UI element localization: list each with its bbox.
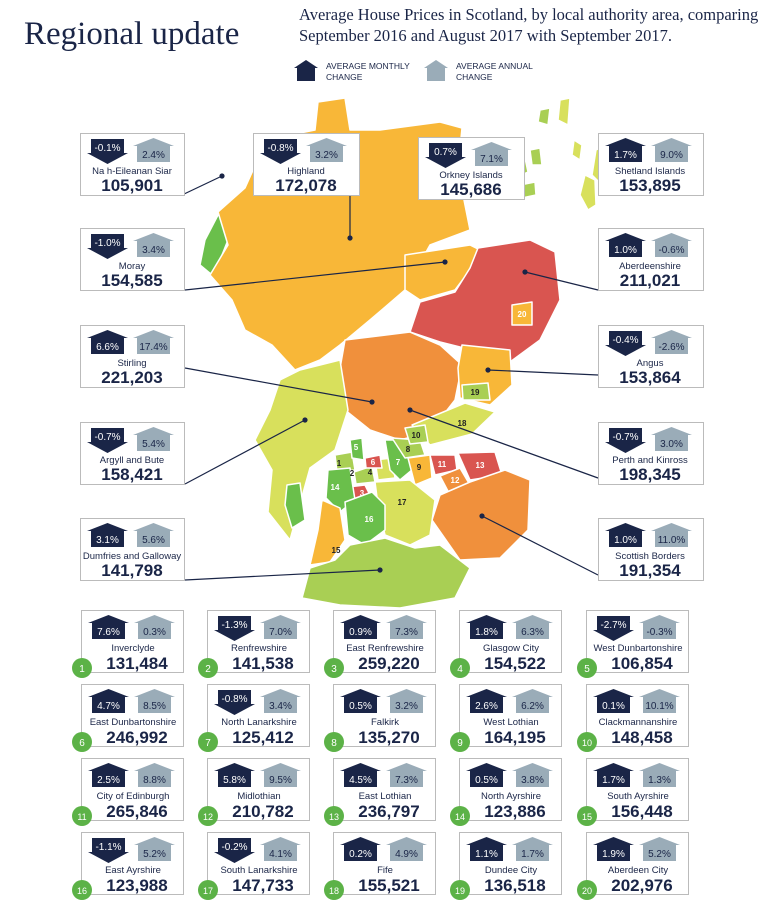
subtitle [299, 5, 758, 45]
grid card 17: South Lanarkshire: 4.1% [269, 849, 292, 860]
grid card 1: Inverclyde: 0.3% [143, 627, 166, 638]
grid card 1: Inverclyde: 1 [79, 664, 85, 675]
grid card 7: North Lanarkshire: 7 [205, 738, 211, 749]
region: Dundee [462, 383, 490, 400]
card: Moray: 3.4% [142, 245, 165, 256]
card: Stirling: Stirling [117, 358, 147, 369]
subtitle: Average House Prices in Scotland, by local authority area, comparing [299, 5, 758, 24]
grid card 16: East Ayrshire: -1.1% [95, 842, 122, 853]
card: Na h-Eileanan Siar: -0.1% [94, 143, 121, 154]
legend: AVERAGE MONTHLY [326, 61, 410, 71]
grid card 11: City of Edinburgh: 8.8% [143, 775, 166, 786]
grid card 10: Clackmannanshire: Clackmannanshire [599, 717, 677, 728]
grid card 10: Clackmannanshire: 0.1% [602, 701, 625, 712]
grid card 11: City of Edinburgh: 265,846 [106, 802, 168, 821]
grid card 8: Falkirk: 0.5% [349, 701, 372, 712]
card: Scottish Borders: Scottish Borders [615, 551, 685, 562]
map numbers: 14 [331, 483, 340, 492]
grid card 11: City of Edinburgh: 11 [77, 812, 87, 822]
card: Scottish Borders [598, 518, 704, 580]
map numbers: 8 [406, 445, 411, 454]
card: Shetland Islands: 1.7% [614, 150, 637, 161]
grid card 7: North Lanarkshire: 125,412 [232, 728, 294, 747]
grid card 11: City of Edinburgh: 2.5% [97, 775, 120, 786]
region: Fife [412, 403, 495, 445]
card: Shetland Islands: Shetland Islands [615, 166, 685, 177]
grid card 14: North Ayrshire: 123,886 [484, 802, 546, 821]
card: Scottish Borders: 1.0% [614, 535, 637, 546]
card: Shetland Islands: 9.0% [660, 150, 683, 161]
map numbers: 9 [417, 463, 422, 472]
grid card 1: Inverclyde [72, 610, 184, 678]
card: Perth and Kinross: 3.0% [660, 439, 683, 450]
legend: CHANGE [456, 72, 493, 82]
grid card 16: East Ayrshire: East Ayrshire [105, 865, 161, 876]
grid card 20: Aberdeen City [577, 832, 688, 900]
grid card 8: Falkirk [324, 684, 436, 752]
legend: CHANGE [326, 72, 363, 82]
grid card 4: Glasgow City: 6.3% [521, 627, 544, 638]
card: Orkney Islands: 0.7% [434, 147, 457, 158]
card: Argyll and Bute: Argyll and Bute [100, 455, 164, 466]
grid card 4: Glasgow City: Glasgow City [483, 643, 539, 654]
region: Argyll and Bute [255, 360, 348, 540]
grid card 2: Renfrewshire: 141,538 [232, 654, 294, 673]
grid card 18: Fife [324, 832, 436, 900]
card: Dumfries and Galloway: Dumfries and Galloway [83, 551, 181, 562]
grid card 8: Falkirk: 135,270 [358, 728, 420, 747]
card: Argyll and Bute: 5.4% [142, 439, 165, 450]
grid card 19: Dundee City: 1.1% [475, 849, 498, 860]
grid card 15: South Ayrshire: South Ayrshire [607, 791, 669, 802]
grid card 7: North Lanarkshire: 3.4% [269, 701, 292, 712]
grid card 6: East Dunbartonshire: 8.5% [143, 701, 166, 712]
card: Na h-Eileanan Siar: Na h-Eileanan Siar [92, 166, 172, 177]
grid card 10: Clackmannanshire: 10.1% [645, 701, 674, 712]
card: Highland: 3.2% [315, 150, 338, 161]
grid card 20: Aberdeen City: 202,976 [611, 876, 673, 895]
grid card 2: Renfrewshire [198, 610, 310, 678]
grid card 7: North Lanarkshire [198, 684, 310, 752]
region: Scottish Borders [432, 470, 530, 560]
grid card 18: Fife: 0.2% [349, 849, 372, 860]
grid card 17: South Lanarkshire: 17 [203, 886, 213, 896]
grid card 18: Fife: Fife [377, 865, 393, 876]
grid card 13: East Lothian: 236,797 [358, 802, 420, 821]
grid card 3: East Renfrewshire: East Renfrewshire [346, 643, 424, 654]
card: Orkney Islands: 145,686 [440, 180, 502, 199]
region: East Ayrshire [345, 492, 385, 545]
grid card 12: Midlothian: 9.5% [269, 775, 292, 786]
grid card 9: West Lothian: 2.6% [475, 701, 498, 712]
map numbers: 16 [365, 515, 374, 524]
grid card 2: Renfrewshire: 2 [205, 664, 211, 675]
grid card 19: Dundee City: 1.7% [521, 849, 544, 860]
card: Shetland Islands [598, 134, 704, 196]
card: Perth and Kinross [598, 422, 704, 484]
card: Angus: -0.4% [612, 335, 639, 346]
map numbers: 10 [412, 431, 421, 440]
grid card 16: East Ayrshire: 123,988 [106, 876, 168, 895]
grid card 7: North Lanarkshire: North Lanarkshire [221, 717, 297, 728]
grid card 15: South Ayrshire [577, 758, 688, 826]
title: Regional update [24, 16, 239, 52]
grid card 18: Fife: 18 [329, 886, 339, 896]
grid card 5: West Dunbartonshire: -0.3% [646, 627, 673, 638]
grid card 20: Aberdeen City: Aberdeen City [608, 865, 668, 876]
grid card 12: Midlothian: 5.8% [223, 775, 246, 786]
grid card 9: West Lothian: 164,195 [484, 728, 546, 747]
card: Stirling: 17.4% [139, 342, 168, 353]
grid card 14: North Ayrshire: North Ayrshire [481, 791, 541, 802]
map numbers: 18 [458, 419, 467, 428]
map numbers: 20 [518, 310, 527, 319]
map numbers: 12 [451, 476, 460, 485]
grid card 9: West Lothian: 9 [457, 738, 463, 749]
grid card 11: City of Edinburgh: City of Edinburgh [97, 791, 169, 802]
card: Highland: 172,078 [275, 176, 337, 195]
grid card 3: East Renfrewshire [324, 610, 436, 678]
grid card 5: West Dunbartonshire: 5 [584, 664, 590, 675]
map numbers: 11 [438, 460, 447, 469]
card: Highland [254, 134, 360, 196]
card: Na h-Eileanan Siar [80, 134, 184, 196]
card: Dumfries and Galloway: 3.1% [96, 535, 119, 546]
grid card 2: Renfrewshire: 7.0% [269, 627, 292, 638]
grid card 10: Clackmannanshire: 10 [582, 738, 592, 748]
region: Dumfries and Galloway [302, 538, 470, 608]
card: Moray: 154,585 [101, 271, 163, 290]
card: Highland: -0.8% [267, 143, 294, 154]
card: Perth and Kinross: -0.7% [612, 432, 639, 443]
card: Argyll and Bute: -0.7% [94, 432, 121, 443]
map numbers [331, 310, 527, 555]
grid card 17: South Lanarkshire: -0.2% [221, 842, 248, 853]
region: Highland [210, 98, 470, 370]
grid card 4: Glasgow City: 154,522 [484, 654, 546, 673]
map numbers: 15 [332, 546, 341, 555]
grid card 20: Aberdeen City: 20 [582, 886, 592, 896]
region: Shetland [558, 98, 610, 210]
grid card 14: North Ayrshire: 0.5% [475, 775, 498, 786]
grid card 17: South Lanarkshire: South Lanarkshire [220, 865, 298, 876]
grid card 6: East Dunbartonshire: 246,992 [106, 728, 168, 747]
grid card 6: East Dunbartonshire: 4.7% [97, 701, 120, 712]
grid card 20: Aberdeen City: 1.9% [602, 849, 625, 860]
grid card 19: Dundee City [450, 832, 562, 900]
grid card 15: South Ayrshire: 15 [582, 812, 592, 822]
card: Na h-Eileanan Siar: 105,901 [101, 176, 163, 195]
map numbers: 6 [371, 458, 376, 467]
grid card 16: East Ayrshire: 5.2% [143, 849, 166, 860]
map of Scotland [200, 98, 610, 608]
grid card 14: North Ayrshire [450, 758, 562, 826]
grid card 5: West Dunbartonshire: 106,854 [611, 654, 673, 673]
card: Scottish Borders: 11.0% [658, 535, 685, 546]
grid card 20: Aberdeen City: 5.2% [648, 849, 671, 860]
card: Moray [80, 228, 184, 290]
card: Aberdeenshire: -0.6% [658, 245, 685, 256]
legend [294, 60, 533, 82]
legend: AVERAGE ANNUAL [456, 61, 533, 71]
grid card 16: East Ayrshire: 16 [77, 886, 87, 896]
grid card 13: East Lothian: 4.5% [349, 775, 372, 786]
grid card 15: South Ayrshire: 1.3% [648, 775, 671, 786]
grid card 2: Renfrewshire: -1.3% [221, 620, 248, 631]
region: Orkney [512, 108, 550, 198]
map numbers: 7 [396, 458, 401, 467]
grid card 6: East Dunbartonshire: East Dunbartonshire [90, 717, 176, 728]
grid card 14: North Ayrshire: 14 [455, 812, 465, 822]
grid card 8: Falkirk: Falkirk [371, 717, 399, 728]
grid card 17: South Lanarkshire [198, 832, 310, 900]
grid card 4: Glasgow City [450, 610, 562, 678]
card: Orkney Islands [418, 138, 524, 200]
grid card 12: Midlothian: 12 [203, 812, 213, 822]
subtitle: September 2016 and August 2017 with September 2017. [299, 26, 672, 45]
card: Orkney Islands: Orkney Islands [439, 170, 503, 181]
map numbers: 1 [337, 459, 342, 468]
grid card 17: South Lanarkshire: 147,733 [232, 876, 294, 895]
region: South Lanarkshire [375, 480, 435, 545]
region: South Ayrshire [310, 500, 345, 565]
grid card 15: South Ayrshire: 156,448 [611, 802, 673, 821]
card: Dumfries and Galloway: 5.6% [142, 535, 165, 546]
card: Aberdeenshire: 211,021 [620, 271, 680, 290]
region: Arran [285, 483, 305, 528]
map numbers: 17 [398, 498, 407, 507]
card: Highland: Highland [287, 166, 325, 177]
map numbers: 5 [354, 443, 359, 452]
card: Angus: -2.6% [658, 342, 685, 353]
grid card 13: East Lothian: 7.3% [395, 775, 418, 786]
map numbers: 13 [476, 461, 485, 470]
region: Moray [405, 245, 480, 300]
card: Moray: -1.0% [94, 238, 121, 249]
grid card 14: North Ayrshire: 3.8% [521, 775, 544, 786]
central belt [335, 452, 355, 472]
map numbers: 19 [471, 388, 480, 397]
grid card 1: Inverclyde: Inverclyde [111, 643, 155, 654]
grid card 1: Inverclyde: 131,484 [106, 654, 168, 673]
grid card 2: Renfrewshire: Renfrewshire [231, 643, 287, 654]
region: Aberdeen City [512, 302, 532, 325]
grid card 7: North Lanarkshire: -0.8% [221, 694, 248, 705]
grid card 19: Dundee City: 19 [455, 886, 465, 896]
card: Perth and Kinross: Perth and Kinross [612, 455, 688, 466]
card: Stirling: 221,203 [101, 368, 163, 387]
map numbers: 4 [368, 468, 373, 477]
grid card 10: Clackmannanshire: 148,458 [611, 728, 673, 747]
card: Scottish Borders: 191,354 [619, 561, 681, 580]
card: Moray: Moray [119, 261, 145, 272]
region: Perth and Kinross [338, 332, 462, 440]
grid card 9: West Lothian: 6.2% [521, 701, 544, 712]
card: Shetland Islands: 153,895 [619, 176, 681, 195]
grid card 4: Glasgow City: 4 [457, 664, 463, 675]
grid card 16: East Ayrshire [72, 832, 184, 900]
card: Aberdeenshire: Aberdeenshire [619, 261, 681, 272]
grid card 12: Midlothian [198, 758, 310, 826]
grid card 5: West Dunbartonshire: -2.7% [600, 620, 627, 631]
card: Argyll and Bute: 158,421 [101, 465, 163, 484]
grid card 13: East Lothian: East Lothian [359, 791, 411, 802]
grid card 3: East Renfrewshire: 3 [331, 664, 337, 675]
grid card 12: Midlothian: Midlothian [237, 791, 281, 802]
card: Aberdeenshire: 1.0% [614, 245, 637, 256]
region: Na h-Eileanan Siar [200, 195, 243, 275]
grid card 8: Falkirk: 8 [331, 738, 337, 749]
card: Angus [598, 326, 704, 388]
card: Angus: Angus [637, 358, 664, 369]
grid card 1: Inverclyde: 7.6% [97, 627, 120, 638]
grid card 3: East Renfrewshire: 259,220 [358, 654, 420, 673]
grid card 3: East Renfrewshire: 7.3% [395, 627, 418, 638]
card: Argyll and Bute [80, 422, 184, 484]
grid card 10: Clackmannanshire [577, 684, 688, 752]
grid card 18: Fife: 4.9% [395, 849, 418, 860]
grid card 13: East Lothian [324, 758, 436, 826]
card: Orkney Islands: 7.1% [480, 154, 503, 165]
grid card 9: West Lothian: West Lothian [483, 717, 539, 728]
grid card 19: Dundee City: 136,518 [484, 876, 546, 895]
map numbers: 2 [350, 469, 355, 478]
card: Angus: 153,864 [619, 368, 681, 387]
grid card 15: South Ayrshire: 1.7% [602, 775, 625, 786]
grid card 6: East Dunbartonshire: 6 [79, 738, 85, 749]
grid card 4: Glasgow City: 1.8% [475, 627, 498, 638]
region: Angus [458, 345, 512, 405]
grid card 5: West Dunbartonshire [577, 610, 688, 678]
map numbers: 3 [360, 489, 365, 498]
cards [72, 134, 704, 900]
card: Aberdeenshire [598, 228, 704, 290]
grid card 12: Midlothian: 210,782 [232, 802, 294, 821]
grid card 6: East Dunbartonshire [72, 684, 184, 752]
leader lines [182, 174, 598, 580]
card: Stirling: 6.6% [96, 342, 119, 353]
card: Dumfries and Galloway: 141,798 [101, 561, 163, 580]
grid card 8: Falkirk: 3.2% [395, 701, 418, 712]
card: Perth and Kinross: 198,345 [619, 465, 681, 484]
card: Dumfries and Galloway [80, 518, 184, 580]
grid card 11: City of Edinburgh [72, 758, 184, 826]
grid card 5: West Dunbartonshire: West Dunbartonshire [593, 643, 683, 654]
card: Stirling [80, 326, 184, 388]
grid card 19: Dundee City: Dundee City [485, 865, 537, 876]
card: Na h-Eileanan Siar: 2.4% [142, 150, 165, 161]
grid card 9: West Lothian [450, 684, 562, 752]
grid card 18: Fife: 155,521 [358, 876, 420, 895]
grid card 3: East Renfrewshire: 0.9% [349, 627, 372, 638]
region: Aberdeenshire [410, 240, 560, 362]
grid card 13: East Lothian: 13 [329, 812, 339, 822]
